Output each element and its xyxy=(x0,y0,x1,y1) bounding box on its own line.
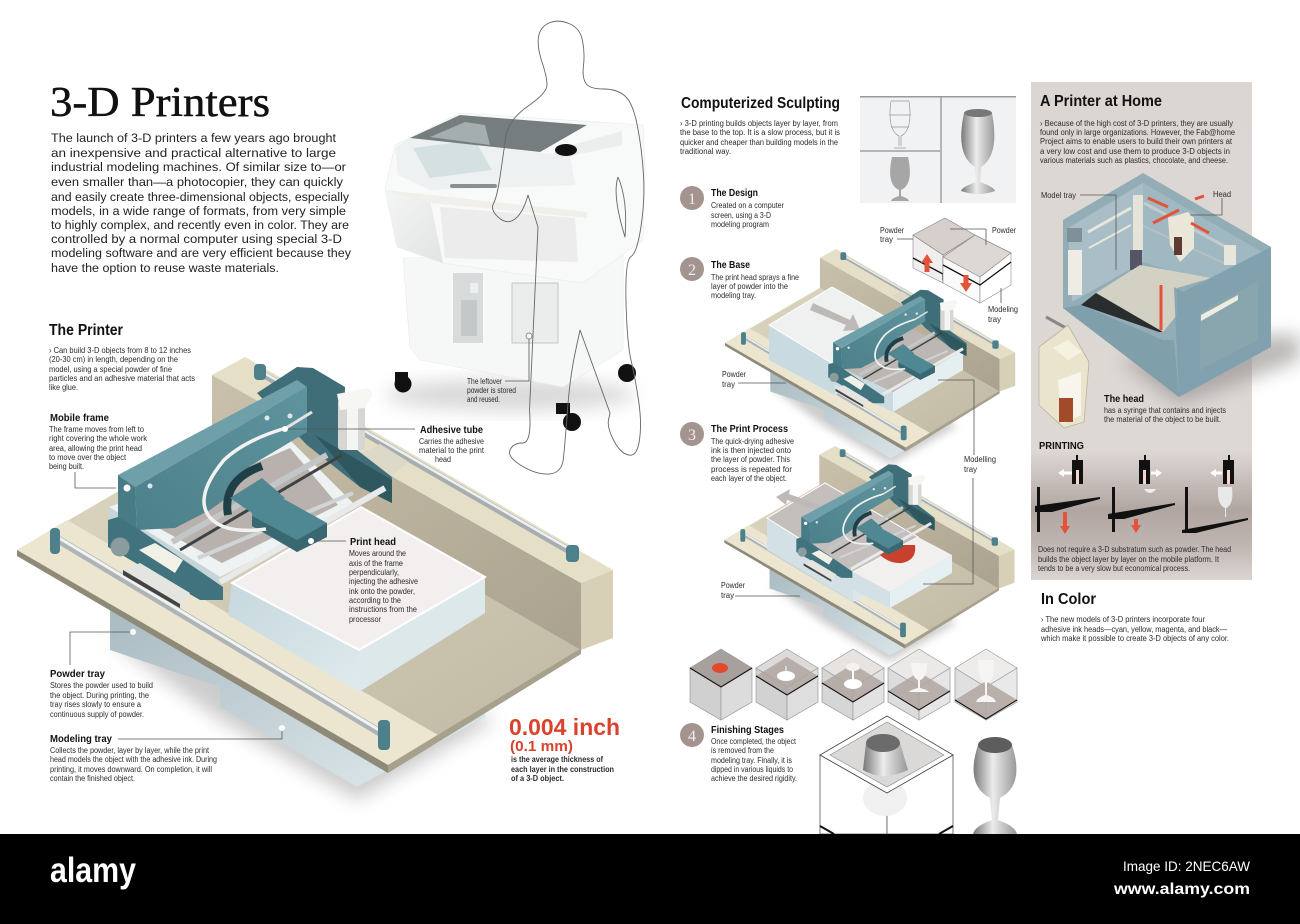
text: sculpting intro xyxy=(680,119,840,156)
arrow: frame motion xyxy=(776,489,820,511)
callout: mobile frame: to move over the object xyxy=(49,453,127,462)
callout: mobile frame xyxy=(49,413,148,488)
big stat: layer thickness: 0.004 inch xyxy=(509,714,620,740)
illustration: main printer mechanism xyxy=(17,357,613,800)
arrow: modeling tray down xyxy=(960,275,972,292)
text: printer intro: particles and an adhesive material that acts xyxy=(49,374,195,383)
panel: a printer at home xyxy=(1031,82,1300,580)
callout: modeling tray: Modeling tray xyxy=(50,734,112,745)
illustration: finished glass xyxy=(973,737,1017,834)
step 4 text: Finishing Stages xyxy=(711,725,784,736)
callout: powder tray: continuous supply of powder. xyxy=(50,710,144,719)
big stat: layer thickness: (0.1 mm) xyxy=(510,738,573,755)
footer: stock photo band xyxy=(0,834,1300,924)
step 3 text: the layer of powder. This xyxy=(711,455,790,464)
diagram: printing stage 1 xyxy=(1035,455,1100,534)
step 3 text: The quick-drying adhesive xyxy=(711,437,794,446)
callout: modeling tray: printing, it moves downward. On completion, it will xyxy=(50,765,212,774)
cube 3 xyxy=(822,649,884,720)
step 3 text xyxy=(680,422,794,483)
intro text block: modeling software and are very efficient because they xyxy=(51,246,352,260)
text: in color: which make it possible to create 3-D objects of any color. xyxy=(1040,634,1229,643)
callout: modeling tray: Collects the powder, layer by layer, while the print xyxy=(50,746,210,755)
illustration: step 2 printer xyxy=(722,249,1015,465)
footer: stock photo band: Image ID: 2NEC6AW xyxy=(1123,858,1251,874)
heading: printing: PRINTING xyxy=(1039,441,1084,452)
title: 3-D Printers xyxy=(50,80,270,126)
big stat: layer thickness xyxy=(509,714,620,783)
head carriage xyxy=(1168,212,1194,262)
callout: mobile frame: Mobile frame xyxy=(50,413,109,424)
diagram: powder and modeling tray cross-section: Modeling xyxy=(988,305,1018,314)
step 4 text: 4 xyxy=(688,728,696,745)
step 1: modeling program xyxy=(711,220,769,229)
big stat: layer thickness: is the average thickness of xyxy=(511,755,603,764)
step 2 text: The Base xyxy=(711,260,750,271)
callout: adhesive tube: Adhesive tube xyxy=(420,425,483,436)
callout: leftover powder xyxy=(467,333,532,404)
callouts: model tray and head: Model tray xyxy=(1041,191,1076,200)
panel intro text: a very low cost and use them to produce 3-D objects in xyxy=(1040,147,1230,156)
step 4 text: is removed from the xyxy=(711,746,774,755)
callout: print head: instructions from the xyxy=(349,605,418,614)
red motion arrows xyxy=(1153,210,1179,223)
callout: powder tray: Stores the powder used to build xyxy=(50,681,153,690)
chart: 3-D modeling screen views xyxy=(860,96,1016,203)
intro text block: have the option to reuse waste materials. xyxy=(51,261,279,275)
text: printer intro: › Can build 3-D objects from 8 to 12 inches xyxy=(49,346,191,355)
text: printer intro xyxy=(49,346,195,392)
intro text block: to highly complex, and recently even in color. They are xyxy=(51,218,349,232)
arrow: powder tray up xyxy=(921,254,933,272)
heading: Computerized Sculpting: Computerized Sculpting xyxy=(681,95,840,112)
illustration: step 3 printer: Powder xyxy=(721,581,745,590)
callout: leftover powder: and reused. xyxy=(467,395,500,404)
text: printing note xyxy=(1038,545,1231,573)
text: printing note: builds the object layer by layer on the mobile platform. It xyxy=(1038,555,1220,564)
footer: stock photo band: www.alamy.com xyxy=(1113,881,1250,898)
callout: mobile frame: being built. xyxy=(49,462,84,471)
step 1: Created on a computer xyxy=(711,201,784,210)
callout: adhesive tube xyxy=(282,425,485,464)
red printed layer xyxy=(880,545,915,563)
diagram: five printing stage cubes xyxy=(690,649,1017,720)
callouts: model tray and head xyxy=(1041,190,1231,270)
callout: adhesive tube: Carries the adhesive xyxy=(419,437,484,446)
cube 2 xyxy=(756,649,818,720)
step 4 text: dipped in various liquids to xyxy=(711,765,793,774)
diagram: powder and modeling tray cross-section: Powder xyxy=(880,226,904,235)
text: printer intro: model, using a special powder of fine xyxy=(49,365,173,374)
wireframe glass xyxy=(889,101,911,148)
step 4 text: Once completed, the object xyxy=(711,737,797,746)
intro text block: industrial modeling machines. Of similar size to—or xyxy=(51,160,346,174)
callout: print head: injecting the adhesive xyxy=(349,577,418,586)
intro text block: controlled by a normal computer using special 3-D xyxy=(51,232,342,246)
callout: print head: Moves around the xyxy=(349,549,406,558)
callout: mobile frame: right covering the whole work xyxy=(49,434,148,443)
step 3 text: ink is then injected onto xyxy=(711,446,792,455)
step 2 text: modeling tray. xyxy=(711,291,756,300)
callout: print head: processor xyxy=(349,615,381,624)
heading: A Printer at Home xyxy=(1040,93,1162,110)
build platform xyxy=(1096,265,1211,332)
text: printer intro: like glue. xyxy=(49,383,78,392)
panel intro text: various materials such as plastics, chocolate, and cheese. xyxy=(1040,156,1228,165)
step 1: screen, using a 3-D xyxy=(711,211,771,220)
step 2 text: layer of powder into the xyxy=(711,282,788,291)
text: printing note: tends to be a very slow but economical process. xyxy=(1038,564,1190,573)
heading: The Printer: The Printer xyxy=(49,322,123,339)
text: the head: the material of the object to be built. xyxy=(1104,415,1221,424)
big stat: layer thickness: of a 3-D object. xyxy=(511,774,564,783)
callout: print head xyxy=(308,537,418,624)
callout: adhesive tube: material to the print xyxy=(419,446,485,455)
powder tray box under frame xyxy=(109,440,357,600)
illustration: step 3 printer: Modelling xyxy=(964,455,996,464)
text: the head: The head xyxy=(1104,394,1144,405)
step 3 text: process is repeated for xyxy=(711,465,792,474)
callout: print head: perpendicularly, xyxy=(349,568,399,577)
illustration: step 3 printer: tray xyxy=(964,465,977,474)
step 3 text: each layer of the object. xyxy=(711,474,787,483)
diagram: powder and modeling tray cross-section xyxy=(880,218,1018,324)
step 4 text xyxy=(680,723,797,783)
panel intro text: Project aims to enable users to build their own printers at xyxy=(1040,137,1233,146)
near walls xyxy=(1174,247,1271,397)
callout: powder tray: tray rises slowly to ensure a xyxy=(50,700,142,709)
footer: stock photo band: alamy xyxy=(50,851,136,890)
illustration: home printer cage xyxy=(1063,173,1300,405)
callout: leftover powder: powder is stored xyxy=(467,386,516,395)
text: in color xyxy=(1040,615,1229,643)
text: sculpting intro: › 3-D printing builds objects layer by layer, from xyxy=(680,119,838,128)
step 2 text xyxy=(680,257,799,300)
callout: modeling tray: head models the object with the adhesive ink. During xyxy=(50,755,217,764)
text: sculpting intro: the base to the top. It is a slow process, but it is xyxy=(680,128,840,137)
text: printing note: Does not require a 3-D substratum such as powder. The head xyxy=(1038,545,1231,554)
illustration: glass emerging from the powder cube xyxy=(820,716,953,834)
callout: mobile frame: area, allowing the print head xyxy=(49,444,142,453)
ghost motion arrow xyxy=(810,303,860,331)
intro text block xyxy=(51,131,352,275)
callout: adhesive tube: head xyxy=(435,455,451,464)
person outline xyxy=(492,21,644,474)
step 2 text: 2 xyxy=(688,262,696,279)
intro text block: even smaller than—a photocopier, they can quickly xyxy=(51,175,344,189)
step 2 text: The print head sprays a fine xyxy=(711,273,799,282)
heading: In Color: In Color xyxy=(1041,591,1096,608)
callout: print head: ink onto the powder, xyxy=(349,587,415,596)
illustration: step 2 printer: tray xyxy=(722,380,735,389)
rendered large glass xyxy=(961,109,995,194)
shaded small glass xyxy=(890,157,910,201)
diagram: printing stage 3 xyxy=(1182,455,1248,533)
panel intro text: › Because of the high cost of 3-D printers, they are usually xyxy=(1040,119,1233,128)
cube 5 xyxy=(955,649,1017,720)
diagram: powder and modeling tray cross-section: tray xyxy=(988,315,1001,324)
illustration: step 3 printer xyxy=(721,446,1015,662)
step 4 text: achieve the desired rigidity. xyxy=(711,774,797,783)
illustration: office 3-D printer photo xyxy=(385,113,645,431)
step 1 xyxy=(680,186,784,229)
callouts: model tray and head: Head xyxy=(1213,190,1231,199)
illustration: syringe head detail xyxy=(1039,317,1089,428)
diagram: powder and modeling tray cross-section: Powder xyxy=(992,226,1016,235)
diagram: printing stage 2 xyxy=(1108,455,1175,533)
callout: powder tray: the object. During printing, the xyxy=(50,691,150,700)
intro text block: models, in a wide range of formats, from very simple xyxy=(51,204,346,218)
text: in color: adhesive ink heads—cyan, yellow, magenta, and black— xyxy=(1041,625,1227,634)
callout: mobile frame: The frame moves from left to xyxy=(49,425,145,434)
callout: print head: axis of the frame xyxy=(349,559,403,568)
step 4 text: modeling tray. Finally, it is xyxy=(711,756,792,765)
text: the head xyxy=(1104,394,1226,424)
step 3 text: The Print Process xyxy=(711,424,788,435)
intro text block: and easily create three-dimensional objects, especially xyxy=(51,190,350,204)
text: in color: › The new models of 3-D printers incorporate four xyxy=(1041,615,1205,624)
panel intro text xyxy=(1040,119,1236,165)
callout: modeling tray xyxy=(50,725,285,783)
step 1: 1 xyxy=(688,191,696,208)
callout: powder tray xyxy=(50,629,153,719)
text: sculpting intro: traditional way. xyxy=(680,147,731,156)
cube 4 xyxy=(888,649,950,720)
step 3 text: 3 xyxy=(688,427,696,444)
illustration: step 3 printer: tray xyxy=(721,591,734,600)
callout: print head: Print head xyxy=(350,537,396,548)
illustration: step 2 printer: Powder xyxy=(722,370,746,379)
intro text block: an inexpensive and practical alternative to large xyxy=(51,146,336,160)
text: sculpting intro: quicker and cheaper than building models in the xyxy=(680,138,839,147)
intro text block: The launch of 3-D printers a few years ago brought xyxy=(51,131,337,145)
callout: leftover powder: The leftover xyxy=(467,377,502,386)
step 1: The Design xyxy=(711,188,758,199)
callout: modeling tray: contain the finished object. xyxy=(50,774,135,783)
panel intro text: found only in large organizations. However, the Fab@home xyxy=(1040,128,1236,137)
text: printer intro: (20-30 cm) in length, depending on the xyxy=(49,355,179,364)
text: the head: has a syringe that contains and injects xyxy=(1104,406,1226,415)
diagram: powder and modeling tray cross-section: tray xyxy=(880,235,893,244)
modeling tray box with powder xyxy=(228,507,485,692)
cube 1 xyxy=(690,649,752,720)
callout: powder tray: Powder tray xyxy=(50,669,105,680)
big stat: layer thickness: each layer in the construction xyxy=(511,765,614,774)
callout: print head: according to the xyxy=(349,596,401,605)
